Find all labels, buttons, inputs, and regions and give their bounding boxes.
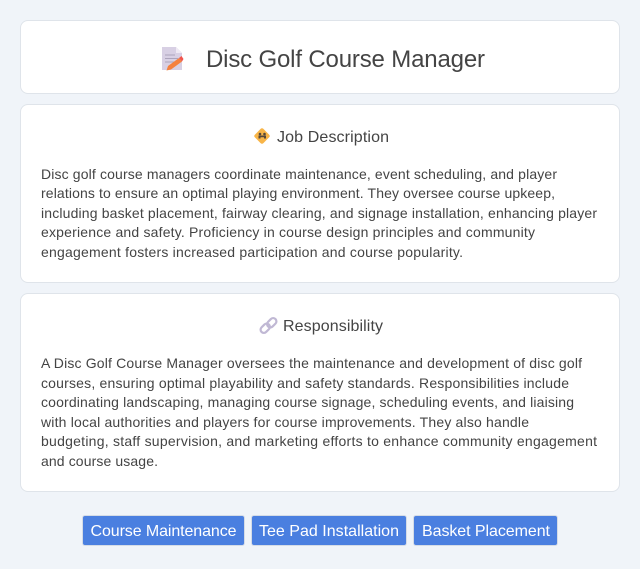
skill tag: Course Maintenance background	[83, 516, 244, 545]
skill tag: Basket Placement background	[414, 516, 557, 545]
text block: job description: relations to ensure an optimal playing environment. They oversee course upkeep,	[41, 185, 555, 201]
skill tag: Tee Pad Installation background	[252, 516, 406, 545]
tag label: Course Maintenance: Course Maintenance	[90, 523, 237, 540]
text block: job description: Disc golf course managers coordinate maintenance, event scheduling, and player	[41, 166, 557, 182]
panel: responsibility card	[20, 293, 620, 492]
icon: document with pencil	[162, 47, 184, 70]
text block: responsibility: with local authorities and players for course improvements. They also handle	[40, 414, 529, 430]
tag label: Basket Placement: Basket Placement	[422, 523, 551, 540]
panel: title card	[20, 20, 620, 94]
heading: Responsibility: Responsibility	[283, 318, 383, 335]
text block: responsibility: budgeting, staff supervision, and marketing efforts to enhance community engagement	[41, 433, 597, 449]
text block: responsibility	[40, 355, 597, 469]
title: Disc Golf Course Manager	[206, 46, 485, 73]
text block: responsibility: A Disc Golf Course Manager oversees the maintenance and development of disc golf	[41, 355, 582, 371]
text block: job description: experience and safety. Proficiency in course design principles and community	[41, 224, 535, 240]
icon: orange diamond sign	[254, 128, 270, 144]
text block: responsibility: coordinating landscaping, managing course signage, scheduling events, and liaising	[41, 394, 574, 410]
heading: Job Description: Job Description	[277, 129, 389, 146]
text block: responsibility: courses, ensuring optimal playability and safety standards. Responsibilities include	[41, 375, 569, 391]
icon: chain link	[259, 317, 278, 334]
tag label: Tee Pad Installation: Tee Pad Installation	[259, 523, 399, 540]
text block: responsibility: and course usage.	[41, 453, 158, 469]
panel: job description card	[20, 104, 620, 283]
text block: job description: including basket placement, fairway clearing, and signage installation, enhancing player	[41, 205, 597, 221]
text block: job description: engagement fosters increased participation and course popularity.	[41, 244, 463, 260]
text block: job description	[41, 166, 597, 260]
